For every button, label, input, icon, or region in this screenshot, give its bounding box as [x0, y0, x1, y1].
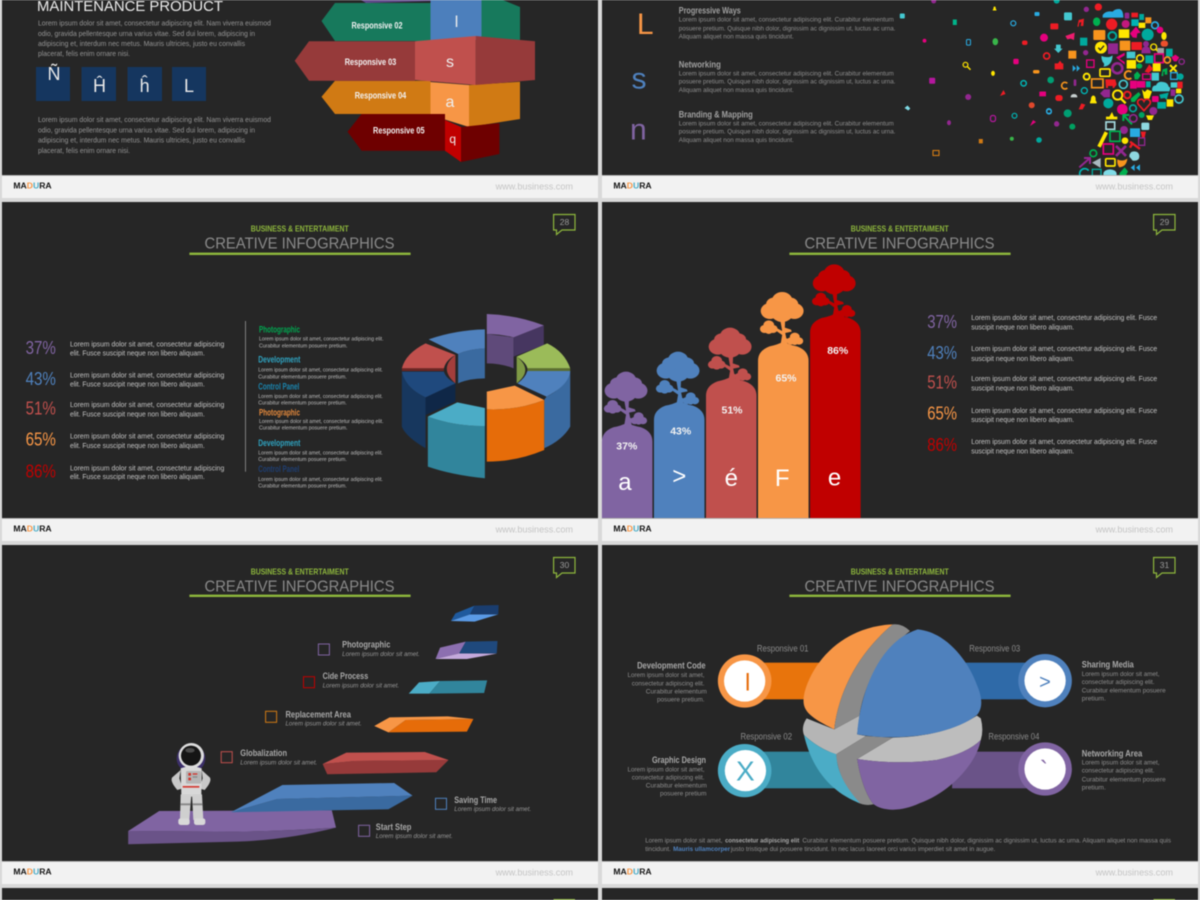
text block: graphic design: Graphic Design [652, 755, 706, 766]
icon squares row [36, 63, 206, 101]
feature list: Curabitur elementum posuere pretium. [258, 457, 347, 463]
slide header: CREATIVE INFOGRAPHICS [204, 579, 394, 596]
tree bar chart [602, 264, 861, 519]
text block: development code: consectetur adipiscing elit. [632, 680, 705, 687]
percent list: elit. Fusce suscipit neque non libero aliquam. [70, 409, 205, 418]
slide header: CREATIVE INFOGRAPHICS [204, 236, 394, 253]
slide header [189, 558, 575, 597]
label: globalization: Lorem ipsum dolor sit amet. [240, 759, 317, 766]
percent list: suscipit neque non libero aliquam. [971, 447, 1074, 456]
circle letter icons: X [736, 756, 755, 787]
text block: upper paragraph: odio, gravida pellentesque urna varius vitae. Sed dui lorem, adipiscing in [38, 29, 255, 38]
text block: lower paragraph: adipiscing et, interdum nec metus. Mauris ultricies, justo eu convallis [38, 136, 245, 144]
text block: bottom paragraph: Lorem ipsum dolor sit amet, [645, 837, 723, 844]
text block: networking: Aliquam aliquet non massa quis tincidunt. [679, 87, 794, 94]
slide header [189, 214, 575, 255]
text block: upper paragraph: adipiscing et, interdum nec metus. Mauris ultricies, justo eu convallis [38, 39, 245, 48]
percent list: 86% [927, 435, 957, 455]
text block: development code: posuere pretium. [657, 697, 705, 704]
feature list: Curabitur elementum posuere pretium. [258, 484, 347, 490]
text block: bottom paragraph: Mauris ullamcorper [673, 846, 730, 853]
footer bar: www.business.com [495, 524, 573, 536]
percent list: elit. Fusce suscipit neque non libero aliquam. [70, 472, 205, 481]
bar letter icons: F [775, 465, 790, 492]
percent list: Lorem ipsum dolor sit amet, consectetur adipiscing [70, 432, 224, 441]
text block: bottom paragraph: tincidunt. [645, 846, 671, 853]
circle letter icons: > [1039, 671, 1051, 693]
label: globalization: Globalization [240, 748, 287, 759]
percent list: Lorem ipsum dolor sit amet, consectetur adipiscing [70, 463, 224, 472]
bar: blue tree [654, 352, 704, 519]
text block: graphic design: consectetur adipiscing elit. [632, 774, 705, 781]
percent list: 51% [26, 398, 56, 418]
panel: donut chart slide 28 [2, 202, 598, 541]
text block: upper paragraph: placerat, felis enim ornare nisi. [38, 49, 130, 58]
text block: branding and mapping: Aliquam aliquet non massa quis tincidunt. [679, 137, 794, 144]
panel: next row left slide edge [2, 888, 598, 900]
label: cide process [304, 671, 399, 690]
letter icons: s [632, 62, 646, 95]
text block: graphic design: posuere pretium [660, 791, 707, 798]
bar: dark red tree [810, 264, 861, 519]
footer bar: www.business.com [495, 182, 573, 192]
slide header: BUSINESS & ENTERTAIMENT [251, 224, 349, 234]
label: globalization [221, 748, 317, 766]
text block: bottom paragraph [645, 837, 1172, 853]
ribbon chart: Responsive 03 [345, 57, 396, 67]
percent list: 65% [927, 404, 957, 424]
scattered social icons [900, 0, 1059, 155]
bar percent labels: 37% [616, 440, 638, 452]
text block: sharing media: Lorem ipsum dolor sit amet, [1082, 671, 1160, 678]
text block: progressive ways: Aliquam aliquet non massa quis tincidunt. [679, 34, 794, 41]
icon head silhouette [1039, 0, 1184, 179]
feature list: Curabitur elementum posuere pretium. [259, 344, 348, 350]
bar letter icons: a [618, 469, 632, 496]
percent list: suscipit neque non libero aliquam. [971, 415, 1074, 424]
percent list: 37% [927, 312, 957, 332]
text block: progressive ways [679, 6, 895, 41]
footer bar: www.business.com [1095, 524, 1173, 536]
percent list: elit. Fusce suscipit neque non libero aliquam. [70, 348, 205, 357]
text block: networking [679, 60, 895, 94]
percent list: suscipit neque non libero aliquam. [971, 354, 1074, 363]
ribbon chart: Responsive 04 [355, 91, 406, 101]
text block: lower paragraph: odio, gravida pellentesque urna varius vitae. Sed dui lorem, adipiscing in [38, 126, 255, 134]
text block: sharing media [1082, 659, 1166, 703]
percent list: Lorem ipsum dolor sit amet, consectetur adipiscing elit. Fusce [971, 313, 1157, 322]
bar letter icons [618, 463, 841, 496]
text block: bottom paragraph: consectetur adipiscing elit [725, 837, 800, 844]
bar letter icons: e [828, 464, 841, 491]
ribbon chart [295, 0, 535, 162]
responsive labels: Responsive 01 [757, 644, 809, 655]
percent list: Lorem ipsum dolor sit amet, consectetur adipiscing [70, 371, 224, 380]
text block: networking: posuere pretium. Quisque nibh dolor, dignissim ac dignissim ut, luctus ac urna. [679, 79, 895, 86]
text block: networking: Networking [679, 60, 721, 70]
bar letter icons: é [725, 465, 738, 492]
letter icons [630, 8, 654, 146]
letter icons: L [637, 8, 654, 41]
text block: branding and mapping: Lorem ipsum dolor sit amet, consectetur adipiscing elit. Curabitur elementum [679, 120, 894, 127]
label: saving time: Saving Time [454, 795, 497, 806]
text block: networking area: Lorem ipsum dolor sit amet, [1082, 760, 1160, 767]
bar: purple tree [602, 372, 652, 519]
circle letter icons: l [745, 670, 750, 697]
text block: development code: Development Code [637, 661, 706, 672]
bar percent labels: 65% [775, 373, 797, 385]
percent list: suscipit neque non libero aliquam. [971, 323, 1074, 332]
responsive labels: Responsive 03 [969, 644, 1020, 655]
text block: sharing media: pretium. [1082, 696, 1106, 703]
text block: networking area [1082, 748, 1166, 792]
bar percent labels [616, 345, 849, 452]
text block: networking area: consectetur adipiscing elit. [1082, 768, 1155, 775]
percent list: 43% [26, 369, 56, 389]
ribbon chart: Responsive 05 [373, 126, 425, 136]
label: photographic [318, 640, 420, 658]
staircase steps [128, 605, 499, 844]
footer bar: MADURA [613, 867, 652, 877]
feature list: Curabitur elementum posuere pretium. [258, 400, 347, 406]
percent list: Lorem ipsum dolor sit amet, consectetur adipiscing elit. Fusce [971, 437, 1157, 446]
footer bar: www.business.com [495, 868, 573, 878]
feature list: Lorem ipsum dolor sit amet, consectetur adipiscing elit. [258, 477, 383, 483]
label: replacement area: Lorem ipsum dolor sit amet. [286, 721, 362, 728]
slide header: 30 [560, 560, 569, 570]
label: photographic: Lorem ipsum dolor sit amet. [342, 651, 420, 658]
footer bar [602, 518, 1198, 541]
panel: staircase slide 30 [2, 545, 598, 884]
label: replacement area: Replacement Area [286, 709, 351, 720]
ribbon chart: Responsive 02 [352, 20, 402, 30]
percent list: 43% [927, 343, 957, 363]
footer bar: MADURA [13, 181, 52, 191]
text block: lower paragraph [38, 115, 271, 155]
feature list: Photographic [259, 325, 300, 336]
text block: lower paragraph: Lorem ipsum dolor sit amet, consectetur adipiscing elit. Nam viverra euismod [38, 115, 271, 124]
text block: bottom paragraph: justo tristique dui posuere tincidunt. In nec lacus laoreet orci varius imperdiet sit amet in augue. [730, 846, 995, 853]
feature list: Curabitur elementum posuere pretium. [259, 426, 348, 432]
panel: sphere slide 31 [602, 545, 1198, 884]
percent list [26, 338, 224, 481]
feature list: Lorem ipsum dolor sit amet, consectetur adipiscing elit. [259, 336, 384, 342]
percent list: Lorem ipsum dolor sit amet, consectetur adipiscing [70, 400, 224, 409]
footer bar [602, 861, 1198, 884]
icon squares row: ĥ [140, 75, 150, 96]
text block: upper paragraph: Lorem ipsum dolor sit amet, consectetur adipiscing elit. Nam viverra euismod [38, 18, 271, 28]
icon squares row: Ĥ [93, 76, 106, 96]
text block: progressive ways: posuere pretium. Quisque nibh dolor, dignissim ac dignissim ut, luctus ac urna. [679, 25, 895, 32]
circle letter icons [736, 670, 1051, 787]
slide header [789, 214, 1175, 255]
feature list: Lorem ipsum dolor sit amet, consectetur adipiscing elit. [258, 394, 383, 400]
percent list: Lorem ipsum dolor sit amet, consectetur adipiscing elit. Fusce [971, 374, 1157, 383]
astronaut figure [172, 743, 210, 825]
label: start step: Start Step [376, 822, 412, 833]
percent list: elit. Fusce suscipit neque non libero aliquam. [70, 441, 205, 450]
panel: maintenance product slide [2, 0, 598, 198]
footer bar [2, 518, 598, 541]
letter icons: n [630, 113, 647, 146]
slide header: 28 [560, 217, 569, 227]
text block: progressive ways: Progressive Ways [679, 6, 741, 16]
bar percent labels: 86% [827, 345, 849, 357]
slide header: CREATIVE INFOGRAPHICS [804, 579, 994, 596]
responsive labels: Responsive 02 [740, 732, 792, 743]
bar letter icons: > [672, 463, 686, 490]
sphere diagram with connectors [718, 624, 1072, 810]
percent list: 65% [26, 430, 56, 450]
percent list: Lorem ipsum dolor sit amet, consectetur adipiscing [70, 340, 224, 349]
percent list [927, 312, 1157, 456]
percent list: 37% [26, 338, 56, 358]
feature list: Control Panel [258, 382, 299, 392]
feature list: Lorem ipsum dolor sit amet, consectetur adipiscing elit. [258, 368, 383, 374]
text block: lower paragraph: placerat, felis enim ornare nisi. [38, 146, 130, 155]
label: saving time [436, 795, 531, 813]
percent list: elit. Fusce suscipit neque non libero aliquam. [70, 379, 205, 388]
text block: branding and mapping: posuere pretium. Quisque nibh dolor, dignissim ac dignissim ut, luctus ac urna. [679, 129, 895, 136]
percent list: suscipit neque non libero aliquam. [971, 383, 1074, 392]
slide header: CREATIVE INFOGRAPHICS [804, 236, 994, 253]
label: cide process: Lorem ipsum dolor sit amet. [323, 683, 399, 690]
feature list: Control Panel [258, 464, 299, 475]
text block: networking area: pretium. [1082, 785, 1106, 792]
label: saving time: Lorem ipsum dolor sit amet. [454, 806, 531, 813]
slide header: BUSINESS & ENTERTAIMENT [251, 567, 349, 577]
slide header: 31 [1160, 560, 1169, 570]
slide header: BUSINESS & ENTERTAIMENT [851, 567, 949, 577]
footer bar [2, 175, 598, 198]
feature list [258, 325, 384, 490]
label: start step [359, 822, 453, 840]
feature list: Lorem ipsum dolor sit amet, consectetur adipiscing elit. [258, 450, 383, 456]
text block: development code: Lorem ipsum dolor sit amet, [628, 672, 705, 679]
feature list: Development [258, 355, 301, 366]
percent list: Lorem ipsum dolor sit amet, consectetur adipiscing elit. Fusce [971, 344, 1157, 353]
icon squares row: L [184, 76, 194, 96]
footer bar: MADURA [613, 524, 652, 534]
panel: next row right slide edge [602, 888, 1198, 900]
responsive labels: Responsive 04 [988, 732, 1039, 743]
ribbon chart: q [449, 132, 456, 146]
label: replacement area [266, 709, 362, 728]
bar: orange tree [758, 292, 809, 519]
footer bar [2, 861, 598, 884]
footer bar [602, 175, 1198, 198]
percent list: 86% [26, 461, 56, 481]
text block: development code: Curabitur elementum [646, 689, 707, 696]
slide header [789, 558, 1175, 597]
footer bar: MADURA [13, 524, 52, 534]
ribbon chart: a [446, 94, 455, 111]
percent list: Lorem ipsum dolor sit amet, consectetur adipiscing elit. Fusce [971, 406, 1157, 415]
text block: branding and mapping [679, 110, 895, 144]
slide header: BUSINESS & ENTERTAIMENT [851, 224, 949, 234]
percent list: 51% [927, 373, 957, 393]
feature list: Lorem ipsum dolor sit amet, consectetur adipiscing elit. [259, 419, 384, 425]
text block: upper paragraph [38, 18, 271, 58]
text block: branding and mapping: Branding & Mapping [679, 110, 753, 120]
text block: development code [628, 661, 707, 704]
footer bar: www.business.com [1095, 182, 1173, 192]
text block: bottom paragraph: Curabitur elementum posuere pretium. Quisque nibh dolor, dignissim ac dignissim ut, luctus ac urna. Aliquam aliquet non massa quis [802, 837, 1172, 844]
circle letter icons: ` [1040, 756, 1048, 784]
3D donut chart [402, 314, 570, 478]
text block: sharing media: Curabitur elementum posuere [1082, 688, 1166, 695]
bar: red tree [706, 328, 757, 519]
text block: networking: Lorem ipsum dolor sit amet, consectetur adipiscing elit. Curabitur elementum [679, 70, 894, 77]
text block: graphic design [628, 755, 707, 798]
slide header: 29 [1160, 217, 1169, 227]
bar percent labels: 51% [721, 404, 743, 416]
feature list: Curabitur elementum posuere pretium. [258, 374, 347, 380]
label: cide process: Cide Process [323, 671, 368, 682]
responsive labels [740, 644, 1039, 743]
bar percent labels: 43% [670, 425, 692, 437]
ribbon chart: l [455, 14, 458, 31]
label: photographic: Photographic [342, 640, 390, 650]
text block: graphic design: Curabitur elementum [646, 783, 707, 790]
text block: sharing media: consectetur adipiscing elit. [1082, 679, 1155, 686]
footer bar: MADURA [613, 181, 652, 191]
footer bar: MADURA [13, 867, 52, 877]
feature list: Development [258, 438, 301, 449]
text block: progressive ways: Lorem ipsum dolor sit amet, consectetur adipiscing elit. Curabitur elementum [679, 17, 894, 24]
panel: tree bars slide 29 [602, 202, 1198, 541]
icon squares row: Ñ [48, 63, 60, 84]
label: start step: Lorem ipsum dolor sit amet. [376, 833, 453, 840]
panel: progressive ways slide [602, 0, 1198, 198]
footer bar: www.business.com [1095, 868, 1173, 878]
feature list: Photographic [259, 408, 300, 419]
text block: graphic design: Lorem ipsum dolor sit amet, [628, 766, 705, 773]
text block: sharing media: Sharing Media [1082, 659, 1134, 670]
text block: networking area: Curabitur elementum posuere [1082, 776, 1166, 783]
ribbon chart: s [446, 54, 454, 71]
text block: networking area: Networking Area [1082, 748, 1143, 759]
